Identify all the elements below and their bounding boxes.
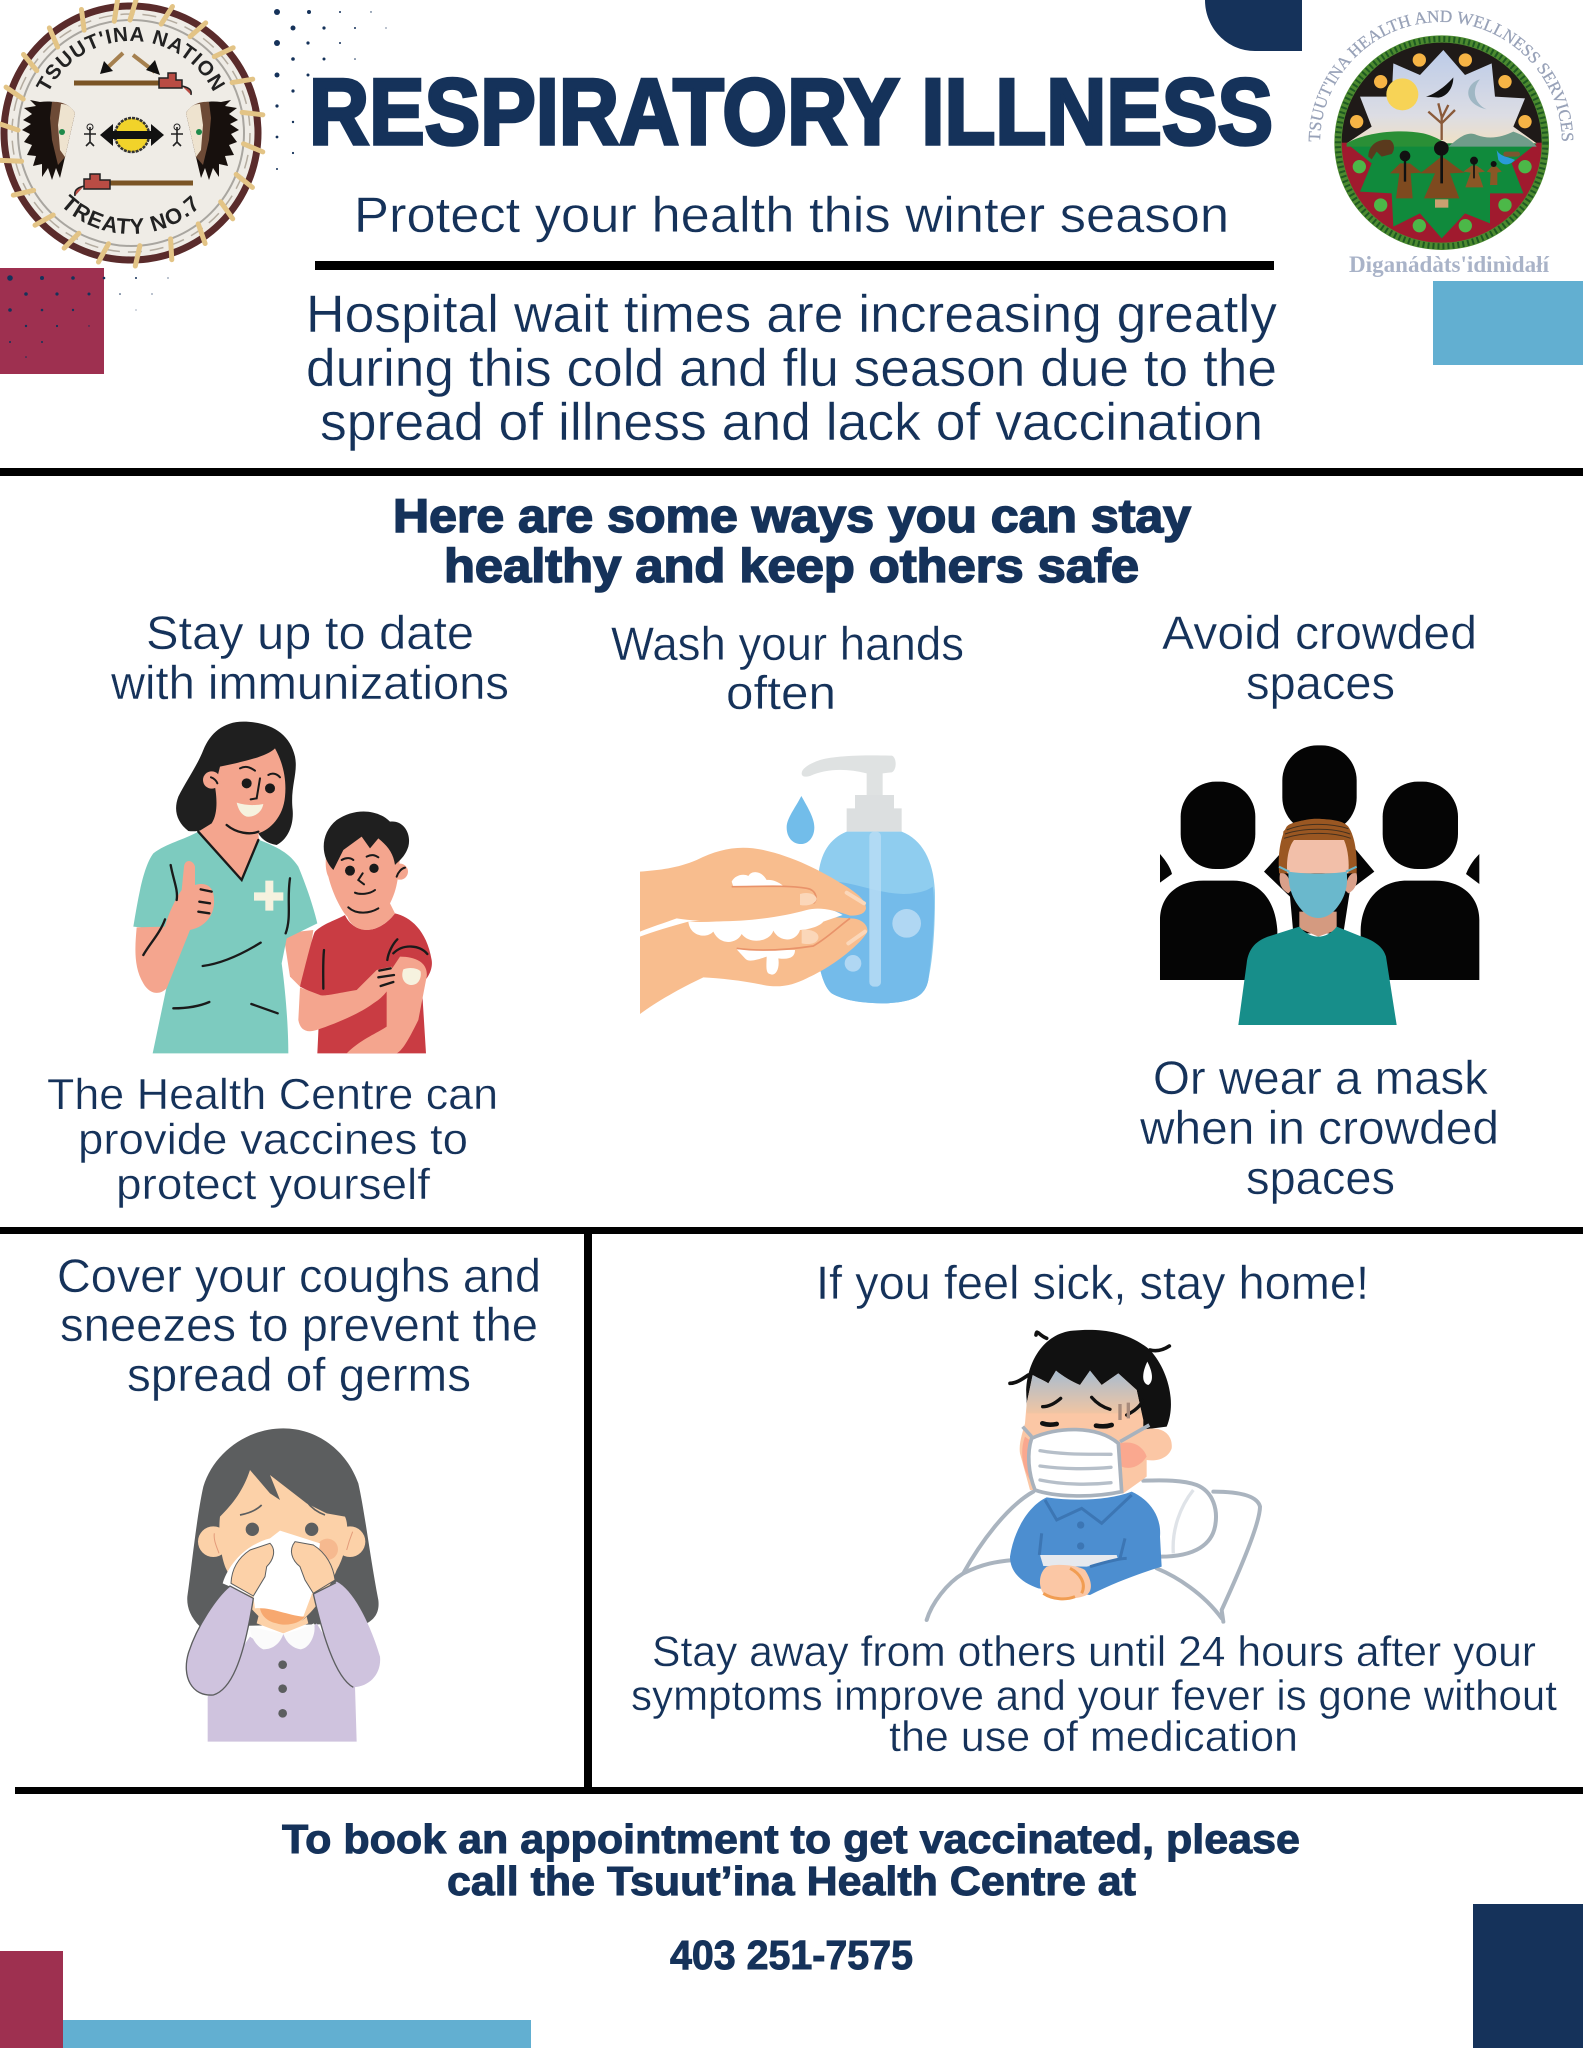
panel: wash hands	[611, 617, 964, 1014]
icon: sick boy in bed	[927, 1330, 1260, 1622]
heading: wash hands	[611, 617, 964, 719]
decorative navy corner shape top	[1205, 0, 1302, 51]
heading: cover coughs: sneezes to prevent the	[60, 1298, 538, 1351]
icon: girl sneezing into tissue	[186, 1428, 380, 1742]
section heading: healthy and keep others safe	[444, 539, 1139, 592]
phone number: 403 251-7575	[670, 1932, 913, 1978]
section heading	[393, 489, 1191, 592]
panel: stay home	[631, 1256, 1557, 1761]
arrows	[105, 53, 155, 72]
caption: stay away	[631, 1628, 1557, 1761]
logo caption: Diganádàts'idinìdałí	[1349, 252, 1550, 277]
call to action: call the Tsuut’ina Health Centre at	[447, 1858, 1136, 1904]
heading: wash hands: Wash your hands	[611, 617, 964, 670]
caption: health centre: provide vaccines to	[78, 1115, 468, 1164]
panel: cover coughs	[57, 1249, 541, 1742]
heading: immunizations: with immunizations	[110, 656, 509, 709]
panel: immunizations	[47, 606, 509, 1209]
caption: wear a mask	[1139, 1051, 1499, 1204]
heading: wash hands: often	[726, 666, 836, 719]
dot pattern	[7, 9, 387, 358]
left headdress	[22, 100, 75, 180]
caption: stay away: symptoms improve and your fever is gone without	[631, 1672, 1557, 1720]
intro text: during this cold and flu season due to the	[306, 339, 1277, 398]
heading: avoid crowds	[1162, 606, 1477, 709]
upper pipe	[74, 80, 162, 86]
panel: avoid crowds	[1139, 606, 1499, 1204]
decorative maroon square bottom left	[0, 1951, 63, 2048]
caption: wear a mask: when in crowded	[1139, 1101, 1499, 1154]
caption: health centre	[47, 1070, 498, 1209]
call to action: To book an appointment to get vaccinated, please	[282, 1816, 1300, 1862]
heading: avoid crowds: spaces	[1246, 656, 1395, 709]
blue rectangle top right	[1433, 281, 1583, 365]
icon: soap and hands	[640, 755, 935, 1014]
intro text: spread of illness and lack of vaccination	[320, 393, 1263, 452]
heading: avoid crowds: Avoid crowded	[1162, 606, 1477, 659]
decorative navy square bottom right	[1473, 1904, 1583, 2048]
caption: health centre: The Health Centre can	[47, 1070, 498, 1119]
caption: wear a mask: spaces	[1246, 1151, 1395, 1204]
logo: Tsuut'ina Health and Wellness Services: TSUUT'INA HEALTH AND WELLNESS SERVICES	[1308, 10, 1574, 142]
intro text	[306, 285, 1277, 452]
boy	[300, 913, 432, 1053]
heading: immunizations: Stay up to date	[146, 606, 474, 659]
right headdress	[186, 100, 239, 180]
stick figures	[84, 127, 183, 146]
heading: cover coughs	[57, 1249, 541, 1401]
central sun with arrow	[115, 118, 149, 152]
heading: cover coughs: spread of germs	[127, 1348, 471, 1401]
heading: immunizations	[110, 606, 509, 709]
heading: stay home: If you feel sick, stay home!	[816, 1256, 1369, 1309]
logo: Tsuut'ina Nation seal: TREATY NO.7	[64, 194, 196, 234]
maroon square top left	[0, 268, 104, 374]
lower pipe	[108, 180, 193, 186]
caption: stay away: the use of medication	[889, 1713, 1298, 1761]
section heading: Here are some ways you can stay	[393, 489, 1191, 542]
icon: masked person in crowd	[1160, 745, 1479, 1025]
caption: health centre: protect yourself	[116, 1160, 431, 1209]
caption: stay away: Stay away from others until 24 hours after your	[652, 1628, 1536, 1676]
logo: Tsuut'ina Health and Wellness Services	[1308, 10, 1574, 277]
logo: Tsuut'ina Nation seal: TSUUT'INA NATION	[36, 26, 226, 92]
heading: cover coughs: Cover your coughs and	[57, 1249, 541, 1302]
title: RESPIRATORY ILLNESS	[309, 59, 1273, 164]
subtitle: Protect your health this winter season	[354, 187, 1229, 243]
decorative blue bar bottom	[63, 2020, 531, 2048]
intro text: Hospital wait times are increasing greatly	[306, 285, 1277, 344]
caption: wear a mask: Or wear a mask	[1153, 1051, 1489, 1104]
logo: Tsuut'ina Nation seal	[0, 0, 266, 268]
call to action	[282, 1816, 1300, 1978]
icon: nurse and boy	[133, 722, 432, 1053]
